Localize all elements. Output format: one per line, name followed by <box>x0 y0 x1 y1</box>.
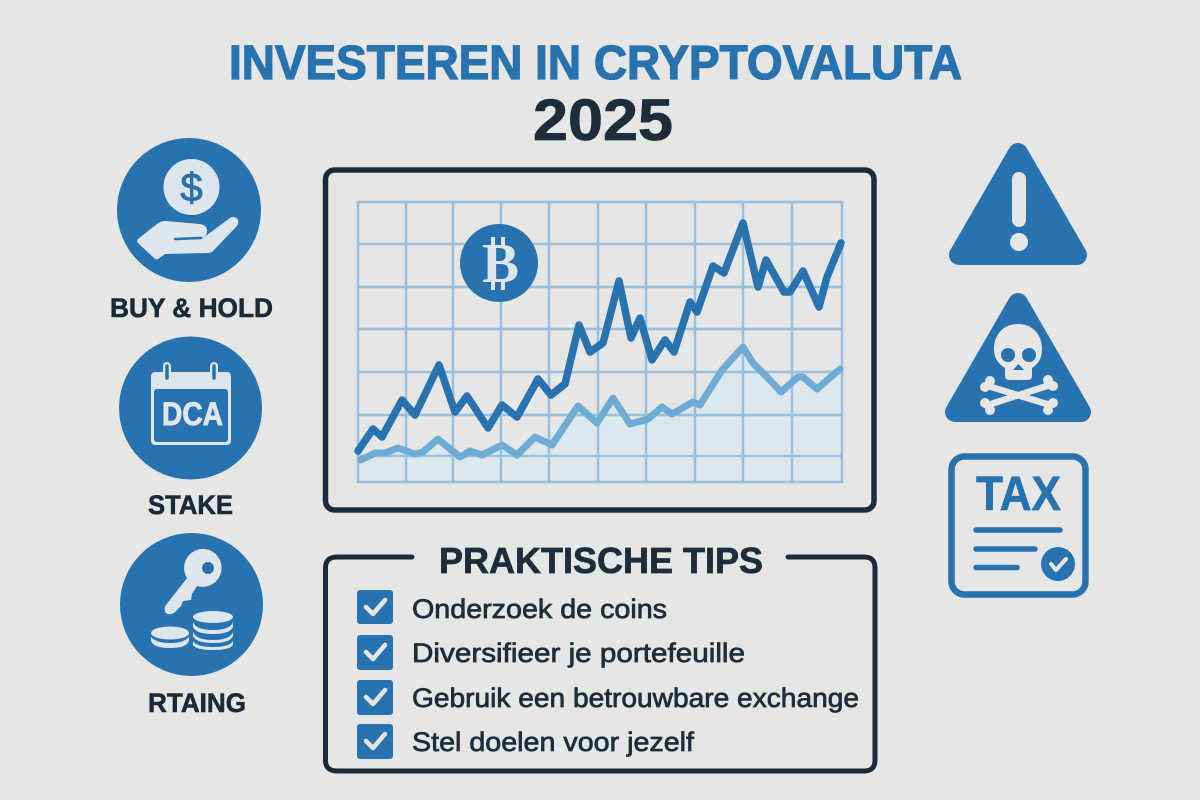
panel: practical tips <box>326 540 875 771</box>
tip 2 <box>357 635 745 670</box>
subtitle: year: 2025 <box>533 88 673 153</box>
icon: skull and crossbones <box>955 303 1081 415</box>
title: INVESTEREN IN CRYPTOVALUTA <box>229 37 962 90</box>
chart line: secondary <box>361 347 840 460</box>
icon: tax document <box>952 456 1086 594</box>
tip 1 <box>357 590 667 624</box>
panel: price chart <box>326 170 874 510</box>
tip 1: Onderzoek de coins <box>412 594 667 624</box>
tip 4: Stel doelen voor jezelf <box>412 727 695 757</box>
icon: tax document: TAX <box>976 468 1061 521</box>
icon: key and coins <box>120 533 263 676</box>
label: buy and hold: BUY & HOLD <box>110 293 273 323</box>
tip 2: Diversifieer je portefeuille <box>412 638 745 668</box>
icon: hand holding coin <box>117 138 261 282</box>
icon: DCA calendar: DCA <box>162 396 223 432</box>
label: stake: STAKE <box>148 490 233 520</box>
icon: warning triangle <box>959 153 1077 255</box>
chart area fill <box>358 347 842 482</box>
icon: bitcoin: B <box>482 233 519 295</box>
label: rtaing: RTAING <box>148 688 246 718</box>
icon: bitcoin <box>460 224 538 302</box>
icon: hand holding coin: $ <box>180 166 203 210</box>
heading: tips: PRAKTISCHE TIPS <box>439 540 763 581</box>
tip 4 <box>357 724 695 759</box>
tip 3: Gebruik een betrouwbare exchange <box>412 683 859 713</box>
chart line: primary <box>358 223 841 451</box>
icon: DCA calendar <box>119 336 262 480</box>
